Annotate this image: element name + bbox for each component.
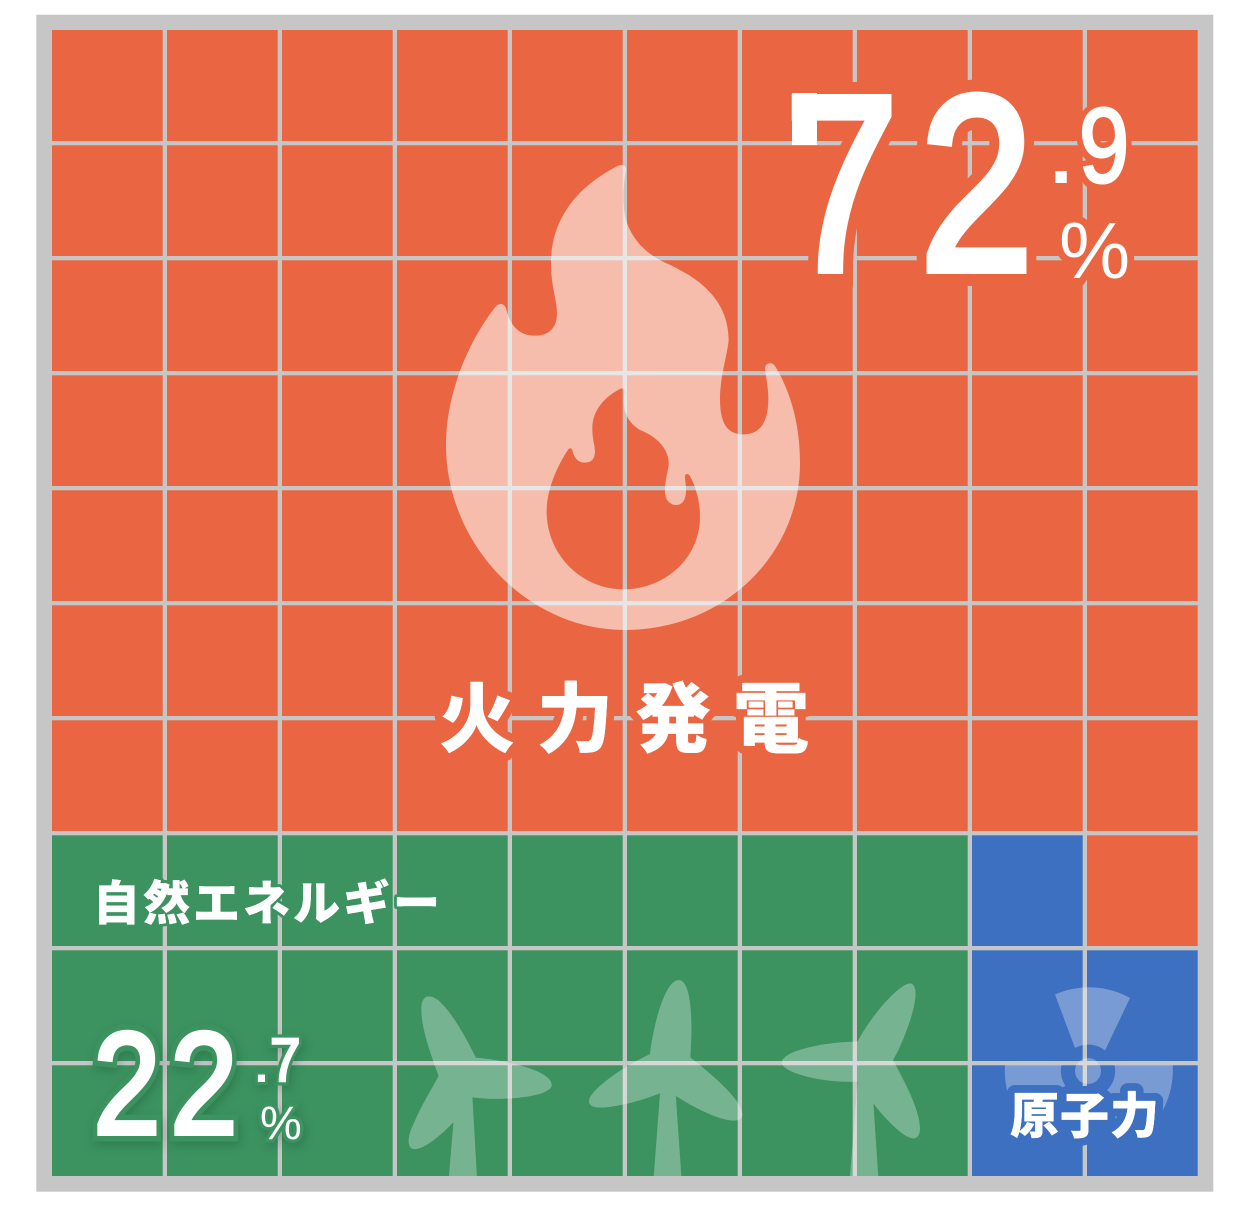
stat: thermal power percentage	[784, 45, 1130, 324]
heading: thermal power label: 火力発電	[439, 678, 809, 763]
stat: renewable energy percentage: 7	[270, 1026, 301, 1095]
stat: thermal power percentage: 9	[1079, 87, 1129, 206]
heading: renewable energy label: 自然エネルギー	[93, 877, 440, 930]
icon: wind turbines	[409, 980, 920, 1176]
icon: wind turbine right	[782, 983, 920, 1176]
icon: radiation symbol	[1004, 987, 1173, 1119]
stat: thermal power percentage: 2	[920, 45, 1034, 324]
icon: flame	[446, 165, 800, 630]
stat: thermal power percentage: 2	[920, 45, 1034, 324]
stat: renewable energy percentage: 2	[170, 1003, 237, 1165]
icon: wind turbine left	[409, 996, 552, 1176]
stat: renewable energy percentage: 7	[270, 1026, 301, 1095]
stat: thermal power percentage: .	[1050, 111, 1072, 200]
stat: thermal power percentage: %	[1059, 206, 1130, 295]
stat: renewable energy percentage: 2	[93, 1003, 160, 1165]
heading: thermal power label: 火力発電	[439, 678, 809, 763]
stat: renewable energy percentage: .	[254, 1037, 268, 1093]
stat: renewable energy percentage: 2	[93, 1003, 160, 1165]
panel: nuclear cells	[968, 831, 1198, 1176]
panel: thermal power cells	[52, 30, 1198, 946]
stat: thermal power percentage: 7	[784, 45, 899, 324]
stat: thermal power percentage: 7	[784, 45, 899, 324]
heading: renewable energy label: 自然エネルギー	[93, 877, 440, 930]
heading: nuclear label: 原子力	[1010, 1090, 1159, 1144]
stat: renewable energy percentage: 2	[170, 1003, 237, 1165]
stat: renewable energy percentage: %	[260, 1096, 302, 1149]
panel: renewable energy cells	[52, 831, 968, 1176]
heading: nuclear label: 原子力	[1010, 1090, 1159, 1144]
stat: thermal power percentage: 9	[1079, 86, 1129, 205]
icon: wind turbine middle	[589, 980, 742, 1176]
stat: renewable energy percentage	[93, 1003, 302, 1165]
